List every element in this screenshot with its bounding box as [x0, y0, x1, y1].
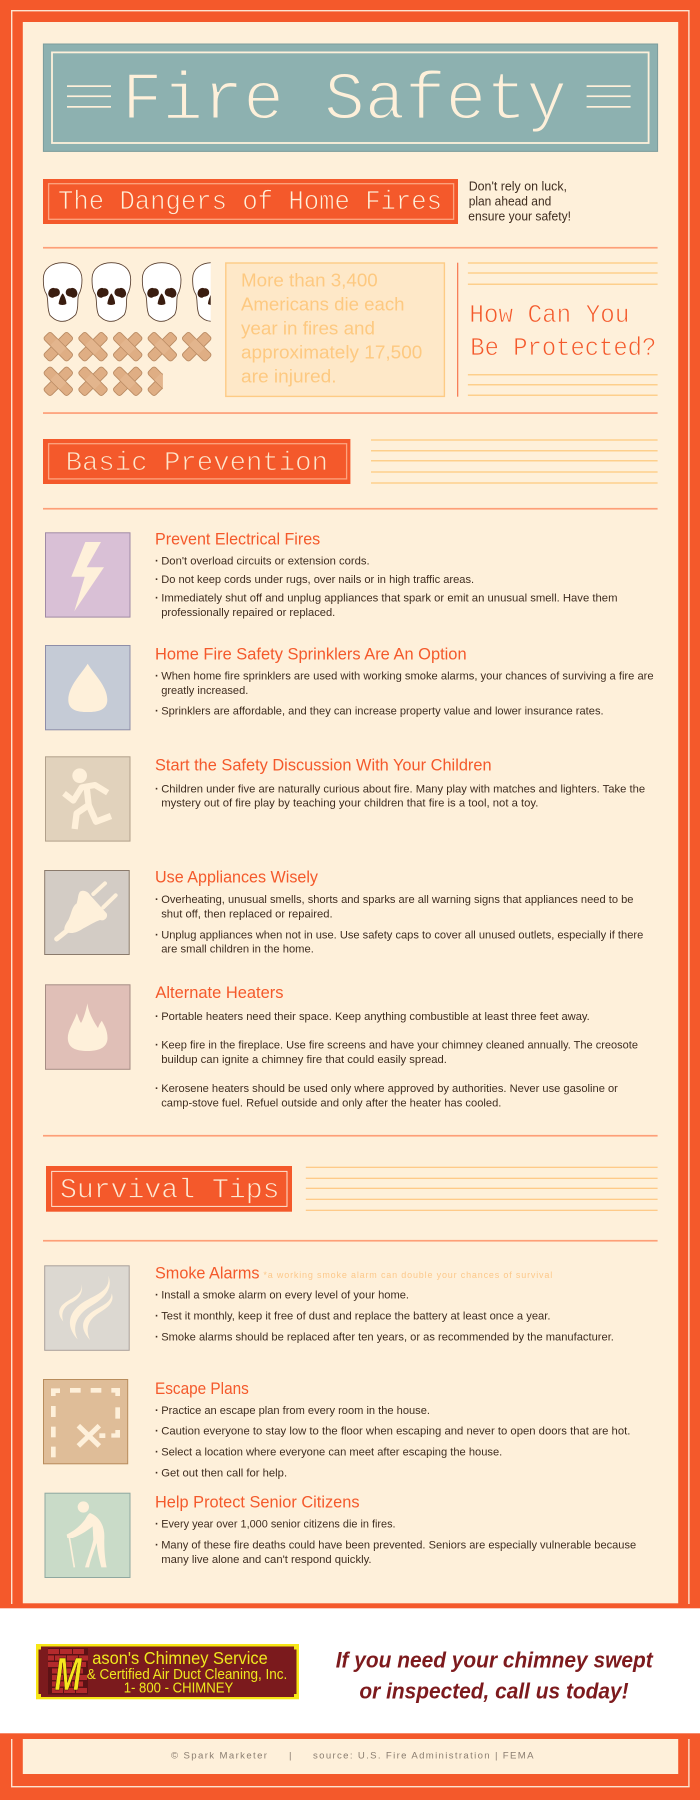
tagline — [468, 180, 571, 224]
heading: Prevent Electrical Fires — [155, 529, 320, 548]
heading: Help Protect Senior Citizens — [155, 1492, 360, 1511]
section heading: Survival Tips — [46, 1166, 292, 1212]
panel: Safety Discussion With Children — [46, 755, 645, 841]
title text: Fire Safety — [122, 62, 567, 140]
panel: Home Fire Safety Sprinklers — [46, 645, 654, 730]
icon: water drop — [46, 646, 130, 730]
heading: Alternate Heaters — [155, 983, 284, 1002]
text block: Sprinklers are affordable, and they can increase property value and lower insurance rates. — [161, 706, 604, 718]
text block: · — [155, 1405, 159, 1417]
logo brick wall — [48, 1648, 88, 1694]
icon: plug — [45, 870, 129, 954]
text block — [155, 1011, 638, 1109]
callout: call to action — [336, 1647, 654, 1703]
footer credits: © Spark Marketer — [171, 1751, 268, 1762]
text block: · — [155, 929, 159, 941]
text block: · — [155, 1467, 159, 1479]
section heading: The Dangers of Home Fires — [43, 179, 458, 224]
text block: Immediately shut off and unplug appliances that spark or emit an unusual smell. Have them — [161, 593, 617, 605]
text block — [155, 671, 654, 718]
section heading: Survival Tips: Survival Tips — [60, 1175, 280, 1206]
text block: Keep fire in the fireplace. Use fire screens and have your chimney cleaned annually. The creosote — [161, 1040, 638, 1052]
text block: Kerosene heaters should be used only where approved by authorities. Never use gasoline or — [161, 1083, 618, 1095]
callout: statistic: approximately 17,500 — [241, 343, 422, 363]
text block: camp-stove fuel. Refuel outside and only after the heater has cooled. — [161, 1097, 501, 1109]
text block: Do not keep cords under rugs, over nails or in high traffic areas. — [161, 574, 474, 586]
text block: Unplug appliances when not in use. Use safety caps to cover all unused outlets, especially if there — [161, 929, 643, 941]
logo: Mason's Chimney Service: ason's Chimney Service — [92, 1648, 268, 1668]
text block: · — [155, 1311, 159, 1323]
text block: Don't overload circuits or extension cords. — [161, 555, 370, 567]
text block: When home fire sprinklers are used with working smoke alarms, your chances of surviving a fire are — [161, 671, 654, 683]
text block: Every year over 1,000 senior citizens die in fires. — [161, 1519, 396, 1531]
text block: · — [155, 555, 159, 567]
icon: running figure — [46, 757, 130, 841]
text block: · — [155, 1539, 159, 1551]
heading: How Can You Be Protected?: Be Protected? — [470, 333, 656, 363]
text block: · — [155, 1083, 159, 1095]
text block: · — [155, 671, 159, 683]
text block: Children under five are naturally curious about fire. Many play with matches and lighters. Take the — [161, 783, 645, 795]
text block: · — [155, 1447, 159, 1459]
text block — [155, 783, 645, 810]
panel: Escape Plans — [44, 1379, 630, 1479]
heading: How Can You Be Protected?: How Can You — [469, 300, 629, 330]
title decoration: right lines — [587, 85, 631, 108]
text block: · — [155, 894, 159, 906]
text block: Portable heaters need their space. Keep anything combustible at least three feet away. — [161, 1011, 590, 1023]
text block: · — [155, 1040, 159, 1052]
footer credits — [171, 1751, 534, 1762]
text block: · — [155, 1519, 159, 1531]
heading: Start the Safety Discussion With Your Children — [155, 755, 492, 774]
title decoration: left lines — [67, 85, 111, 108]
text block: · — [155, 1011, 159, 1023]
text block: · — [155, 1331, 159, 1343]
icons: bandages — [43, 331, 212, 397]
text block — [155, 555, 618, 619]
icon: escape map — [44, 1380, 128, 1464]
icon: senior with cane — [45, 1493, 130, 1578]
tagline: ensure your safety! — [468, 210, 571, 224]
text block: · — [155, 593, 159, 605]
text block: are small children in the home. — [161, 944, 314, 956]
icons: skulls — [43, 263, 231, 321]
panel: Alternate Heaters — [46, 983, 638, 1109]
footer credits: | — [289, 1751, 292, 1762]
panel: Use Appliances Wisely — [45, 868, 643, 956]
panel: Help Protect Senior Citizens — [45, 1492, 636, 1578]
text block: · — [155, 783, 159, 795]
footer frame — [0, 1733, 700, 1800]
heading: Use Appliances Wisely — [155, 868, 319, 887]
text block — [155, 1290, 614, 1343]
section heading: The Dangers of Home Fires: The Dangers of Home Fires — [58, 187, 442, 217]
text block: · — [155, 1426, 159, 1438]
icon: lightning bolt — [46, 533, 130, 617]
footer credits: source: U.S. Fire Administration | FEMA — [313, 1751, 534, 1762]
logo: Mason's Chimney Service: 1- 800 - CHIMNEY — [124, 1680, 234, 1696]
text block: · — [155, 706, 159, 718]
callout: statistic: More than 3,400 — [241, 270, 378, 290]
text block — [155, 894, 643, 956]
section heading: Basic Prevention: Basic Prevention — [66, 448, 328, 478]
text block: Get out then call for help. — [161, 1467, 287, 1479]
heading: Escape Plans — [155, 1379, 249, 1398]
tagline: plan ahead and — [469, 195, 551, 209]
text block: Smoke alarms should be replaced after ten years, or as recommended by the manufacturer. — [161, 1331, 614, 1343]
text block: greatly increased. — [161, 685, 248, 697]
icon: smoke — [45, 1266, 129, 1350]
panel: Prevent Electrical Fires — [46, 529, 618, 619]
callout: call to action: If you need your chimney swept — [336, 1647, 654, 1672]
text block: mystery out of fire play by teaching your children that fire is a tool, not a toy. — [161, 798, 538, 810]
text block: Test it monthly, keep it free of dust and replace the battery at least once a year. — [161, 1311, 550, 1323]
logo: Mason's Chimney Service: & Certified Air Duct Cleaning, Inc. — [87, 1667, 287, 1683]
text block: shut off, then replaced or repaired. — [161, 909, 333, 921]
text block: · — [155, 1290, 159, 1302]
text block — [155, 1405, 630, 1479]
callout: statistic: are injured. — [241, 367, 337, 387]
text block: Many of these fire deaths could have been prevented. Seniors are especially vulnerable because — [161, 1539, 636, 1551]
text block — [155, 1519, 636, 1566]
icon: flame — [46, 985, 130, 1069]
text block: professionally repaired or replaced. — [161, 607, 335, 619]
callout: call to action: or inspected, call us today! — [359, 1678, 629, 1703]
text block: Select a location where everyone can meet after escaping the house. — [161, 1447, 502, 1459]
text block: Practice an escape plan from every room in the house. — [161, 1405, 430, 1417]
text block: · — [155, 574, 159, 586]
logo: Mason's Chimney Service — [36, 1644, 299, 1700]
title banner — [43, 44, 658, 151]
text block: many live alone and can't respond quickly. — [161, 1554, 372, 1566]
heading: Smoke Alarms — [155, 1263, 260, 1282]
text block: buildup can ignite a chimney fire that could easily spread. — [161, 1054, 447, 1066]
tagline: Don't rely on luck, — [469, 180, 567, 194]
panel: Smoke Alarms — [45, 1263, 614, 1350]
text block: Overheating, unusual smells, shorts and sparks are all warning signs that appliances need to be — [161, 894, 633, 906]
heading: How Can You Be Protected? — [469, 300, 656, 363]
section heading: Basic Prevention — [43, 439, 350, 484]
logo: Mason's Chimney Service: M — [54, 1648, 83, 1700]
callout: statistic: year in fires and — [241, 318, 375, 338]
note: *a working smoke alarm can double your chances of survival — [263, 1270, 552, 1280]
callout: statistic: Americans die each — [241, 294, 404, 314]
text block: Install a smoke alarm on every level of your home. — [161, 1290, 409, 1302]
text block: Caution everyone to stay low to the floor when escaping and never to open doors that are hot. — [161, 1426, 630, 1438]
heading: Home Fire Safety Sprinklers Are An Option — [155, 645, 467, 664]
callout: statistic — [226, 263, 444, 396]
